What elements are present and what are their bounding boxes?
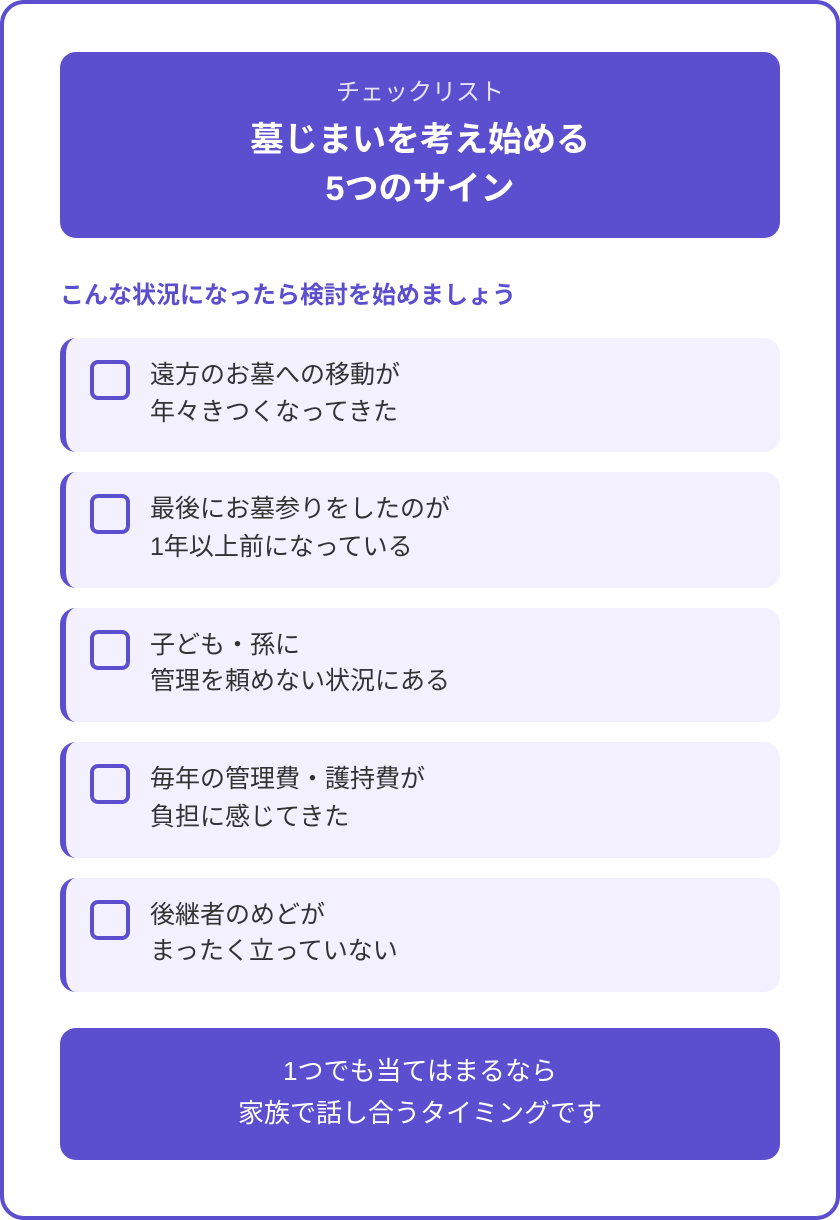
item text <box>150 631 450 695</box>
section heading: こんな状況になったら検討を始めましょう <box>60 282 516 309</box>
footer callout <box>60 1028 780 1160</box>
item text: 子ども・孫に <box>150 631 300 659</box>
footer callout: 1つでも当てはまるなら <box>283 1056 557 1086</box>
item text: 毎年の管理費・護持費が <box>150 765 425 793</box>
item text: 最後にお墓参りをしたのが <box>150 495 450 523</box>
icon: empty checkbox <box>90 360 130 400</box>
item text <box>150 361 400 426</box>
checklist item 3 <box>60 608 780 722</box>
checklist item 2 <box>60 472 780 588</box>
item text: 年々きつくなってきた <box>150 398 398 426</box>
item text: まったく立っていない <box>150 937 398 965</box>
item text <box>150 495 450 561</box>
icon: empty checkbox <box>90 494 130 534</box>
item text: 負担に感じてきた <box>150 803 349 831</box>
item text: 管理を頼めない状況にある <box>150 667 450 695</box>
icon: empty checkbox <box>90 764 130 804</box>
eyebrow label: チェックリスト <box>336 79 504 106</box>
item text: 遠方のお墓への移動が <box>150 361 400 389</box>
item text <box>150 765 425 831</box>
title: 墓じまいを考え始める <box>250 121 590 159</box>
checklist item 1 <box>60 338 780 452</box>
icon: empty checkbox <box>90 900 130 940</box>
item text <box>150 901 398 965</box>
icon: empty checkbox <box>90 630 130 670</box>
checklist item 5 <box>60 878 780 992</box>
header panel <box>60 52 780 238</box>
title <box>250 121 590 208</box>
item text: 1年以上前になっている <box>150 533 413 561</box>
checklist item 4 <box>60 742 780 858</box>
title: 5つのサイン <box>326 170 514 208</box>
footer callout: 家族で話し合うタイミングです <box>238 1098 602 1128</box>
item text: 後継者のめどが <box>150 901 325 929</box>
